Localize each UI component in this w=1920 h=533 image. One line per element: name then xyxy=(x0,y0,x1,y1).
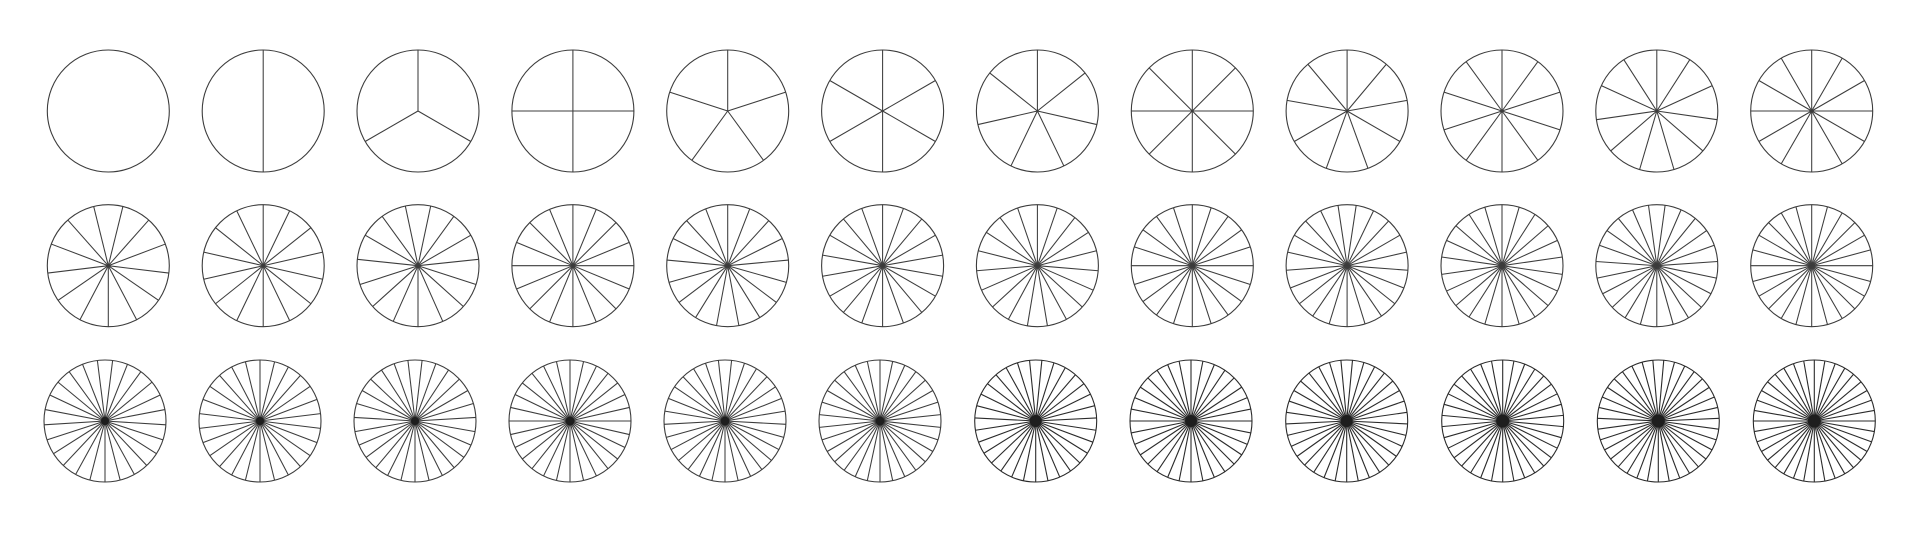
circle: 34 segments xyxy=(1442,360,1564,482)
centre hubs of the row 3 circles xyxy=(101,414,1821,428)
circle: 15 segments xyxy=(357,205,479,327)
row 1: circles with 1 to 12 segments xyxy=(47,50,1873,172)
circle: 33 segments xyxy=(1286,360,1408,482)
circle: 31 segments xyxy=(975,360,1097,482)
row 3: circles with 25 to 36 segments xyxy=(44,360,1875,482)
circle: 17 segments xyxy=(667,205,789,327)
circle: 12 segments xyxy=(1751,50,1873,172)
circle: 19 segments xyxy=(976,205,1098,327)
circle: 35 segments xyxy=(1597,360,1719,482)
circle: 13 segments xyxy=(47,205,169,327)
circle: 5 segments xyxy=(667,50,789,172)
circle: 25 segments xyxy=(44,360,166,482)
circle: 16 segments xyxy=(512,205,634,327)
circle: 1 segment xyxy=(47,50,169,172)
circle: 32 segments xyxy=(1130,360,1252,482)
circle: 10 segments xyxy=(1441,50,1563,172)
circle: 20 segments xyxy=(1131,205,1253,327)
circle: 14 segments xyxy=(202,205,324,327)
circle: 3 segments xyxy=(357,50,479,172)
circle: 27 segments xyxy=(354,360,476,482)
circle: 4 segments xyxy=(512,50,634,172)
circle: 29 segments xyxy=(664,360,786,482)
circle: 9 segments xyxy=(1286,50,1408,172)
circle: 36 segments xyxy=(1753,360,1875,482)
circle: 22 segments xyxy=(1441,205,1563,327)
circle: 6 segments xyxy=(822,50,944,172)
circle: 7 segments xyxy=(976,50,1098,172)
circle: 11 segments xyxy=(1596,50,1718,172)
circle: 28 segments xyxy=(509,360,631,482)
circle: 8 segments xyxy=(1131,50,1253,172)
circle: 24 segments xyxy=(1751,205,1873,327)
circle: 21 segments xyxy=(1286,205,1408,327)
row 2: circles with 13 to 24 segments xyxy=(47,205,1873,327)
circle: 18 segments xyxy=(822,205,944,327)
circle: 2 segments xyxy=(202,50,324,172)
circle: 23 segments xyxy=(1596,205,1718,327)
circle: 30 segments xyxy=(819,360,941,482)
circle: 26 segments xyxy=(199,360,321,482)
